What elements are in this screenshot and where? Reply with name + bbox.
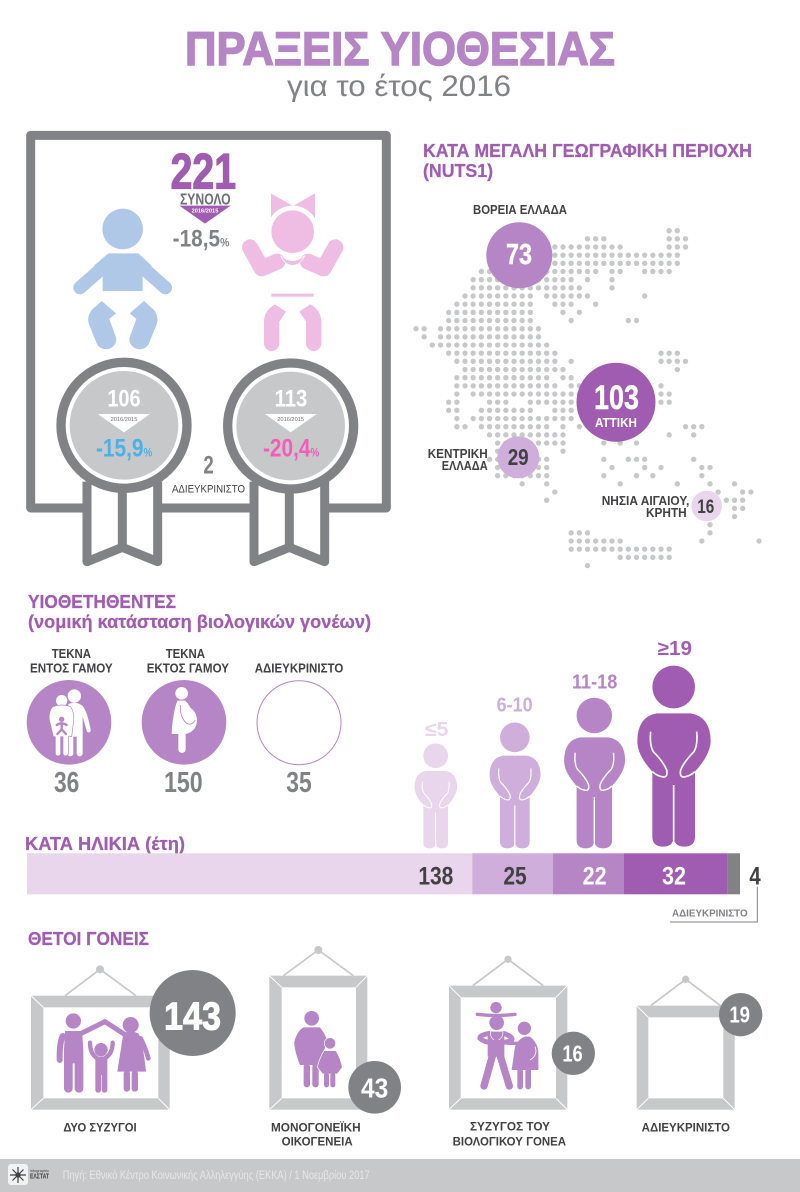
adoptive parents left pair — [31, 946, 401, 1149]
rosette: boys: 2016/2015 — [111, 417, 137, 423]
rosette: girls: -20,4% — [263, 435, 320, 463]
rosette: boys: -15,9% — [96, 435, 153, 463]
age group 11-18: 22 — [583, 862, 607, 890]
heading: by geographic region: ΚΑΤΑ ΜΕΓΑΛΗ ΓΕΩΓΡΑΦΙΚΗ ΠΕΡΙΟΧΗ — [423, 140, 752, 161]
status: unspecified — [255, 662, 344, 799]
logo: ΕΛΣΤΑΤ — [30, 1174, 50, 1180]
region bubble: central Greece 29 — [497, 436, 539, 478]
rosette: boys — [56, 358, 192, 562]
frame: single parent — [269, 946, 401, 1114]
dotted map of Greece — [416, 231, 759, 566]
frame: two spouses — [31, 965, 236, 1110]
age unspecified callout — [670, 862, 761, 922]
label: spouse of biological parent: ΣΥΖΥΓΟΣ ΤΟΥ — [470, 1120, 551, 1134]
frame: two spouses: 143 — [164, 994, 221, 1038]
heading: adoptive parents: ΘΕΤΟΙ ΓΟΝΕΙΣ — [28, 929, 149, 949]
region bubble: Attica 103: ΑΤΤΙΚΗ — [595, 416, 637, 430]
subtitle: για το έτος 2016 — [287, 70, 511, 103]
frame: unspecified — [637, 976, 762, 1110]
label: unspecified: ΑΔΙΕΥΚΡΙΝΙΣΤΟ — [642, 1121, 730, 1135]
total label: ΣΥΝΟΛΟ — [180, 191, 231, 208]
heading: adoptees legal status: (νομική κατάσταση βιολογικών γονέων) — [28, 611, 371, 632]
total change arrow: 2016/2015 — [192, 209, 218, 215]
unspecified count: 2 — [203, 451, 214, 479]
status: in wedlock: ΤΕΚΝΑ — [52, 647, 91, 661]
region label: northern Greece: ΒΟΡΕΙΑ ΕΛΛΑΔΑ — [473, 203, 567, 217]
region label: central Greece — [428, 447, 488, 473]
status: unspecified: ΑΔΙΕΥΚΡΙΝΙΣΤΟ — [255, 662, 344, 676]
logo: infographic — [30, 1168, 49, 1173]
heading: by geographic region: (NUTS1) — [423, 160, 493, 181]
age figures and values — [415, 638, 761, 922]
status: out of wedlock — [142, 647, 230, 799]
frame: unspecified: 19 — [729, 1002, 750, 1028]
region label: Aegean islands and Crete — [602, 494, 689, 520]
age group 11-18 — [564, 672, 625, 890]
footer — [0, 1159, 800, 1192]
stacked age bar — [27, 853, 740, 894]
age group 19 and over: ≥19 — [658, 638, 692, 660]
region bubble: northern Greece 73 — [486, 222, 552, 288]
age group up to 5 — [415, 719, 457, 890]
region bubble: Attica 103: 103 — [594, 379, 639, 417]
status: unspecified: 35 — [286, 767, 312, 799]
heading: adoptees legal status: ΥΙΟΘΕΤΗΘΕΝΤΕΣ — [28, 591, 176, 612]
age unspecified callout: 4 — [749, 862, 761, 890]
region label: central Greece: ΚΕΝΤΡΙΚΗ — [428, 447, 488, 461]
rosette: girls — [223, 358, 358, 562]
region bubble: central Greece 29: 29 — [508, 444, 529, 470]
region bubble: Aegean islands 16 — [691, 491, 722, 521]
status: out of wedlock: ΕΚΤΟΣ ΓΑΜΟΥ — [147, 662, 230, 676]
age group 6-10: 6-10 — [497, 695, 533, 717]
label: single parent family: ΟΙΚΟΓΕΝΕΙΑ — [282, 1135, 353, 1149]
adoptive parents right pair — [449, 956, 762, 1149]
status: out of wedlock: 150 — [164, 767, 203, 799]
age group 19 and over — [637, 638, 711, 890]
icon: family with child — [60, 1013, 148, 1093]
picture frame — [31, 135, 386, 508]
unspecified count: ΑΔΙΕΥΚΡΙΝΙΣΤΟ — [172, 484, 245, 496]
status: out of wedlock: ΤΕΚΝΑ — [166, 647, 205, 661]
region label: central Greece: ΕΛΛΑΔΑ — [442, 459, 488, 473]
status: in wedlock: ΕΝΤΟΣ ΓΑΜΟΥ — [30, 662, 113, 676]
icon: parents with baby — [49, 689, 91, 756]
region bubble: northern Greece 73: 73 — [506, 239, 532, 271]
rosette: girls: 2016/2015 — [277, 417, 304, 423]
frame: spouse of biological parent — [449, 956, 595, 1110]
rosette: girls: 113 — [275, 386, 307, 413]
icon: pregnant woman — [172, 687, 197, 753]
age group up to 5: 138 — [418, 862, 453, 890]
label: single parent family: ΜΟΝΟΓΟΝΕΪΚΗ — [271, 1120, 361, 1135]
logo — [8, 1164, 50, 1185]
region bubble: Aegean islands 16: 16 — [697, 497, 714, 518]
age group 11-18: 11-18 — [572, 672, 617, 694]
age group up to 5: ≤5 — [425, 719, 448, 741]
frame: spouse of biological parent: 16 — [562, 1041, 583, 1067]
status: in wedlock: 36 — [54, 767, 79, 799]
label: single parent family — [271, 1120, 361, 1149]
region label: Aegean islands and Crete: ΝΗΣΙΑ ΑΙΓΑΙΟΥ, — [602, 494, 689, 508]
total change arrow — [179, 206, 231, 224]
age group 6-10 — [490, 695, 541, 890]
region bubble: Attica 103 — [576, 363, 656, 442]
heading: adoptees legal status — [28, 591, 371, 632]
source note: Πηγή: Εθνικό Κέντρο Κοινωνικής Αλληλεγγύης (ΕΚΚΑ) / 1 Νοεμβρίου 2017 — [63, 1170, 370, 1182]
rosette: boys: 106 — [107, 386, 141, 413]
unspecified count — [172, 451, 245, 496]
icon: baby girl — [250, 193, 335, 351]
total number 221: 221 — [171, 143, 236, 199]
label: spouse of biological parent: ΒΙΟΛΟΓΙΚΟΥ ΓΟΝΕΑ — [453, 1135, 566, 1149]
age group 6-10: 25 — [503, 862, 527, 890]
status: in wedlock — [27, 647, 113, 799]
heading: by geographic region — [423, 140, 752, 181]
age unspecified callout: ΑΔΙΕΥΚΡΙΝΙΣΤΟ — [672, 909, 748, 920]
region label: Aegean islands and Crete: ΚΡΗΤΗ — [646, 506, 687, 520]
panel: total adoptions by sex — [31, 135, 386, 562]
label: two spouses: ΔΥΟ ΣΥΖΥΓΟΙ — [63, 1121, 137, 1135]
total change percent: -18,5% — [173, 226, 230, 253]
title: ΠΡΑΞΕΙΣ ΥΙΟΘΕΣΙΑΣ — [185, 22, 615, 75]
icon: baby boy — [80, 209, 165, 349]
icon: parent and child — [294, 1011, 342, 1087]
heading: by age: ΚΑΤΑ ΗΛΙΚΙΑ (έτη) — [25, 833, 185, 854]
age group 19 and over: 32 — [662, 862, 686, 890]
icon: adult carrying child with partner — [477, 1002, 538, 1089]
label: spouse of biological parent — [453, 1120, 566, 1149]
frame: single parent: 43 — [361, 1073, 388, 1104]
